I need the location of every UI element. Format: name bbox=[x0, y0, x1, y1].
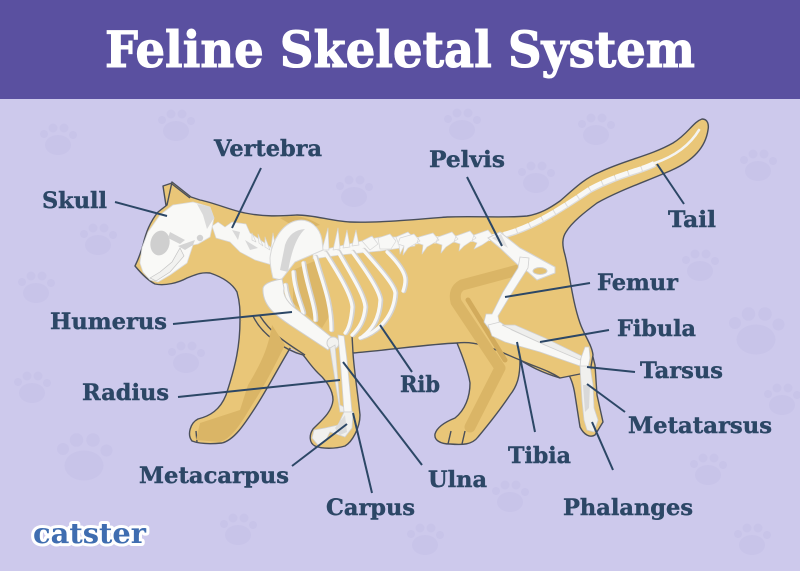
label: phalanges: Phalanges bbox=[563, 495, 693, 521]
label: humerus: Humerus bbox=[50, 309, 167, 335]
background paw pattern bbox=[14, 108, 800, 555]
skull bbox=[140, 202, 214, 282]
label: tail: Tail bbox=[668, 207, 716, 233]
main body, tail and near legs bbox=[135, 119, 708, 448]
ribs bbox=[285, 250, 406, 338]
label: metatarsus: Metatarsus bbox=[628, 413, 772, 439]
radius and ulna bbox=[330, 335, 353, 412]
pelvis bbox=[488, 232, 555, 280]
femur bbox=[484, 257, 529, 330]
label: rib: Rib bbox=[400, 372, 440, 398]
far front leg bbox=[190, 320, 292, 444]
cat body bbox=[135, 119, 708, 448]
shadow: shoulder bbox=[280, 216, 320, 230]
label: skull: Skull bbox=[42, 188, 107, 214]
label: ulna: Ulna bbox=[428, 467, 487, 493]
label: tibia: Tibia bbox=[508, 443, 571, 469]
hind foot bones bbox=[580, 347, 598, 432]
far hind leg bbox=[540, 345, 603, 436]
paw and leg outlines bbox=[172, 184, 560, 444]
shadow: far hind leg bbox=[455, 270, 518, 427]
shadow: rib cage bbox=[293, 260, 333, 328]
tibia and fibula bbox=[488, 322, 582, 366]
label: metacarpus: Metacarpus bbox=[139, 463, 289, 489]
spine bbox=[212, 222, 494, 265]
label: femur: Femur bbox=[597, 270, 679, 296]
leader lines bbox=[115, 164, 684, 493]
label: fibula: Fibula bbox=[617, 316, 696, 342]
far ear bbox=[163, 183, 185, 212]
label: pelvis: Pelvis bbox=[429, 147, 505, 173]
title: Feline Skeletal System bbox=[105, 20, 695, 79]
label: tarsus: Tarsus bbox=[640, 358, 723, 384]
catster logo: catster bbox=[33, 517, 147, 550]
label: vertebra: Vertebra bbox=[213, 136, 322, 162]
header banner bbox=[0, 0, 800, 99]
labels bbox=[42, 136, 772, 521]
tail bones bbox=[490, 130, 699, 238]
label: carpus: Carpus bbox=[326, 495, 415, 521]
scapula bbox=[270, 220, 323, 280]
label: radius: Radius bbox=[82, 380, 169, 406]
shadow: far fore leg bbox=[196, 325, 285, 442]
front paw bones bbox=[312, 412, 353, 445]
humerus bbox=[263, 279, 339, 350]
skeleton bbox=[140, 130, 699, 445]
